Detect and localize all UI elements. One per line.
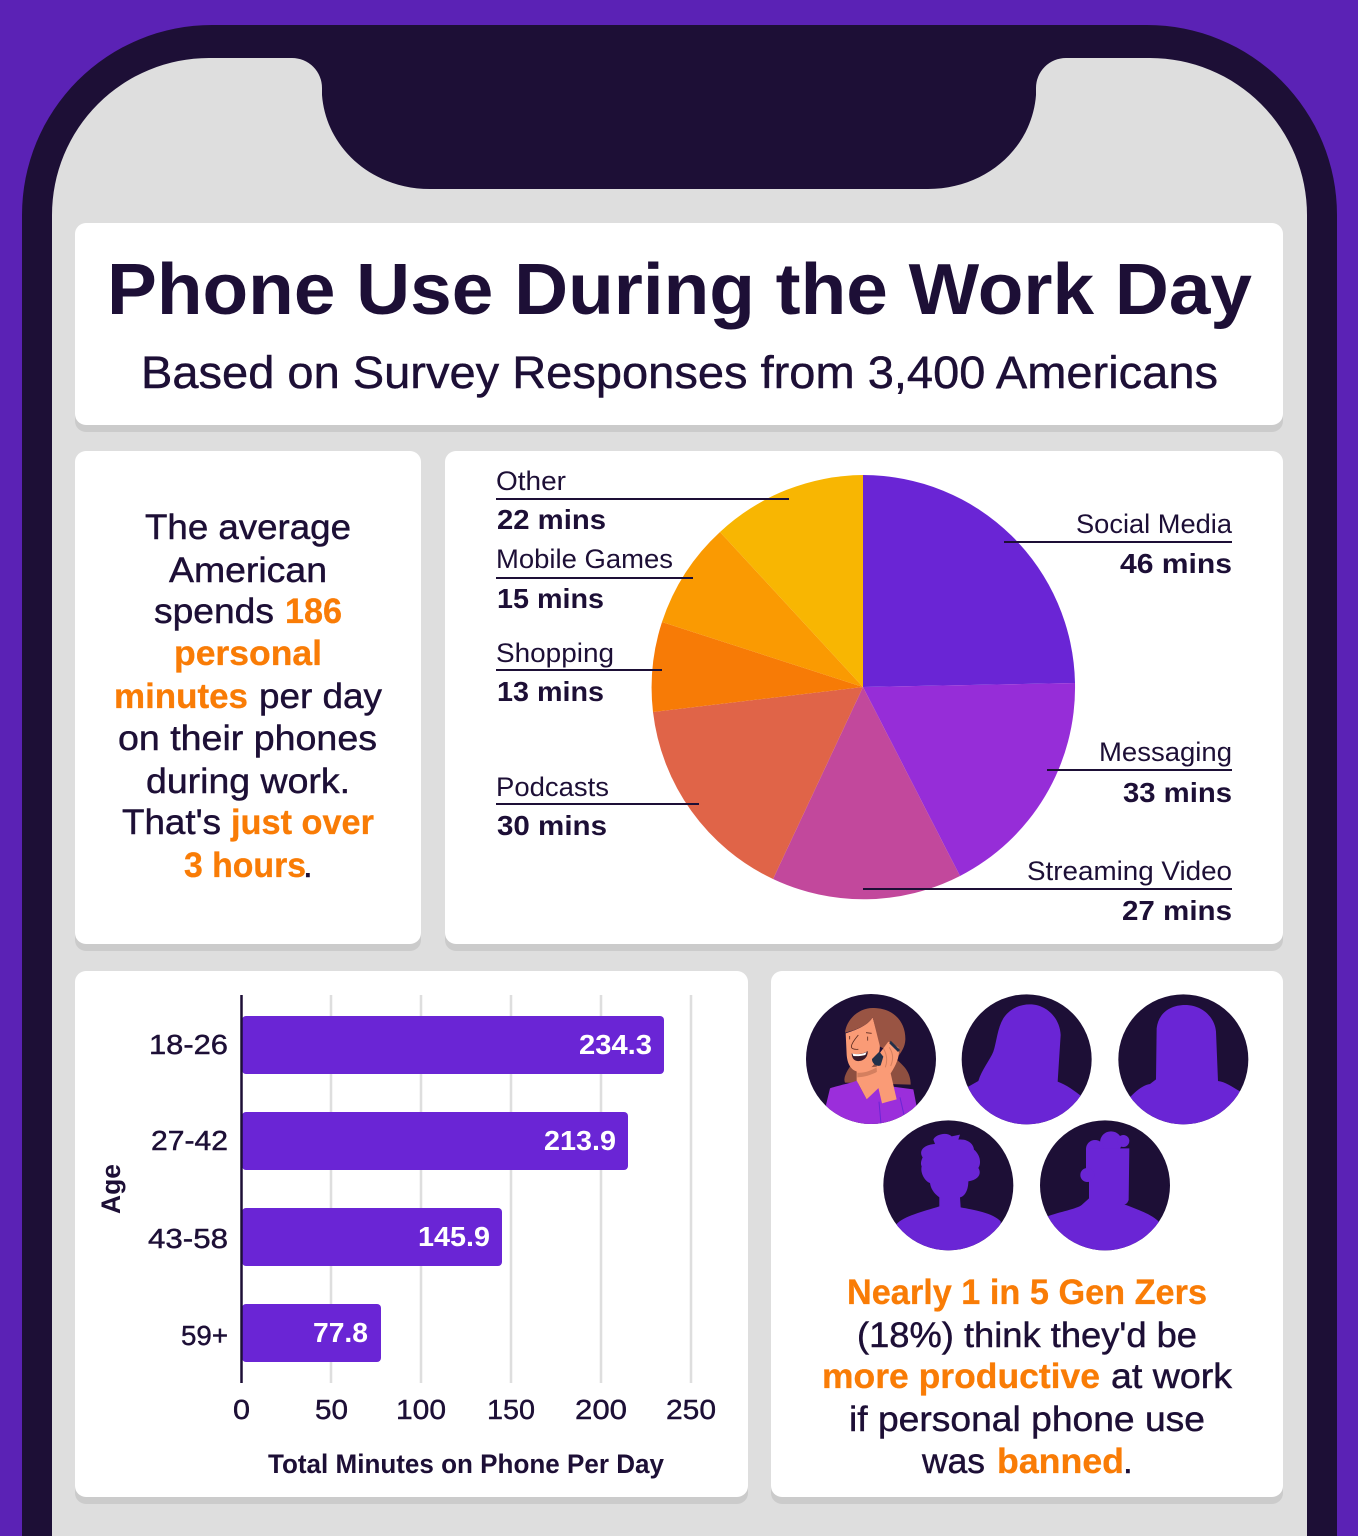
icon: woman on phone <box>806 994 936 1130</box>
bar: 27-42: 213.9 <box>544 1125 616 1156</box>
text block: average American: 3 hours <box>184 846 306 885</box>
label: Social Media: Social Media <box>1076 509 1233 539</box>
y axis title: Age <box>96 1164 126 1214</box>
x axis tick labels: 50 <box>315 1394 348 1425</box>
text block: average American: American <box>169 551 327 590</box>
label: Other: Other <box>496 466 566 496</box>
bar: 27-42: 27-42 <box>151 1125 228 1156</box>
label: Shopping: 13 mins <box>497 676 604 707</box>
bar: 27-42 <box>151 1112 628 1170</box>
bar: 59+: 77.8 <box>313 1317 368 1348</box>
text block: average American: just over <box>230 803 374 842</box>
bar: 18-26 <box>149 1016 664 1074</box>
panel: bar chart <box>75 971 748 1504</box>
text block: Gen Zers: Nearly 1 in 5 Gen Zers <box>847 1273 1207 1312</box>
text block: average American: That's <box>122 803 221 842</box>
text block: average American: per day <box>259 677 383 716</box>
label: Social Media <box>1004 509 1233 579</box>
label: Other: 22 mins <box>497 504 606 535</box>
panel: Gen Z <box>771 971 1283 1504</box>
label: Podcasts <box>496 772 699 841</box>
label: Streaming Video <box>863 856 1232 926</box>
text block: average American: on their phones <box>118 719 377 758</box>
bar: 43-58: 43-58 <box>148 1223 228 1254</box>
text block: average American: . <box>303 846 313 885</box>
label: Mobile Games: Mobile Games <box>496 544 673 574</box>
text block: Gen Zers: . <box>1123 1442 1133 1481</box>
text block: Gen Zers: banned <box>997 1442 1124 1481</box>
y axis line <box>240 995 243 1383</box>
text block: average American: 186 <box>285 592 342 631</box>
text block: average American: during work. <box>146 762 350 801</box>
label: Messaging: Messaging <box>1099 737 1232 767</box>
x axis tick labels: 200 <box>575 1394 627 1425</box>
x axis tick labels: 0 <box>233 1394 250 1425</box>
text block: average American: spends <box>154 592 274 631</box>
text block: average American: personal <box>174 634 322 673</box>
pie chart <box>652 475 1075 899</box>
x axis tick labels <box>233 1394 716 1425</box>
subtitle: Based on Survey Responses from 3,400 Americans <box>141 347 1218 398</box>
text block: Gen Zers: at work <box>1111 1357 1233 1396</box>
text block: Gen Zers: if personal phone use <box>849 1400 1205 1439</box>
panel: pie chart <box>445 451 1283 951</box>
panel: average minutes <box>75 451 421 951</box>
icon: silhouette long hair <box>962 994 1092 1128</box>
icon: silhouette short hair <box>1040 1120 1170 1252</box>
label: Podcasts: 30 mins <box>497 810 607 841</box>
panel: title <box>75 223 1283 432</box>
label: Streaming Video: Streaming Video <box>1027 856 1232 886</box>
label: Podcasts: Podcasts <box>496 772 609 802</box>
label: Streaming Video: 27 mins <box>1122 895 1232 926</box>
heading: Phone Use During the Work Day <box>107 250 1252 330</box>
x axis tick labels: 250 <box>666 1394 716 1425</box>
text block: Gen Zers <box>822 1273 1233 1481</box>
bar: 43-58 <box>148 1208 502 1266</box>
label: Mobile Games <box>496 544 693 614</box>
label: Shopping <box>496 638 662 707</box>
x axis title: Total Minutes on Phone Per Day <box>268 1449 664 1479</box>
label: Mobile Games: 15 mins <box>497 583 604 614</box>
label: Social Media: 46 mins <box>1120 548 1232 579</box>
label: Messaging: 33 mins <box>1123 777 1232 808</box>
bar: 43-58: 145.9 <box>418 1221 490 1252</box>
label: Shopping: Shopping <box>496 638 614 668</box>
label: Messaging <box>1047 737 1232 808</box>
text block: average American: minutes <box>114 677 248 716</box>
text block: Gen Zers: (18%) think they'd be <box>857 1316 1197 1355</box>
text block: Gen Zers: was <box>921 1442 985 1481</box>
icon: silhouette curly hair <box>883 1120 1013 1251</box>
portraits <box>806 994 1248 1252</box>
bar: 18-26: 234.3 <box>579 1029 652 1060</box>
text block: average American: The average <box>145 508 351 547</box>
bar: 18-26: 18-26 <box>149 1029 228 1060</box>
bar: 59+ <box>181 1304 381 1362</box>
icon: silhouette straight hair <box>1118 994 1248 1128</box>
x axis tick labels: 150 <box>487 1394 535 1425</box>
x axis tick labels: 100 <box>396 1394 446 1425</box>
label: Other <box>496 466 789 535</box>
text block: average American <box>114 508 383 885</box>
text block: Gen Zers: more productive <box>822 1357 1100 1396</box>
bar: 59+: 59+ <box>181 1320 228 1351</box>
